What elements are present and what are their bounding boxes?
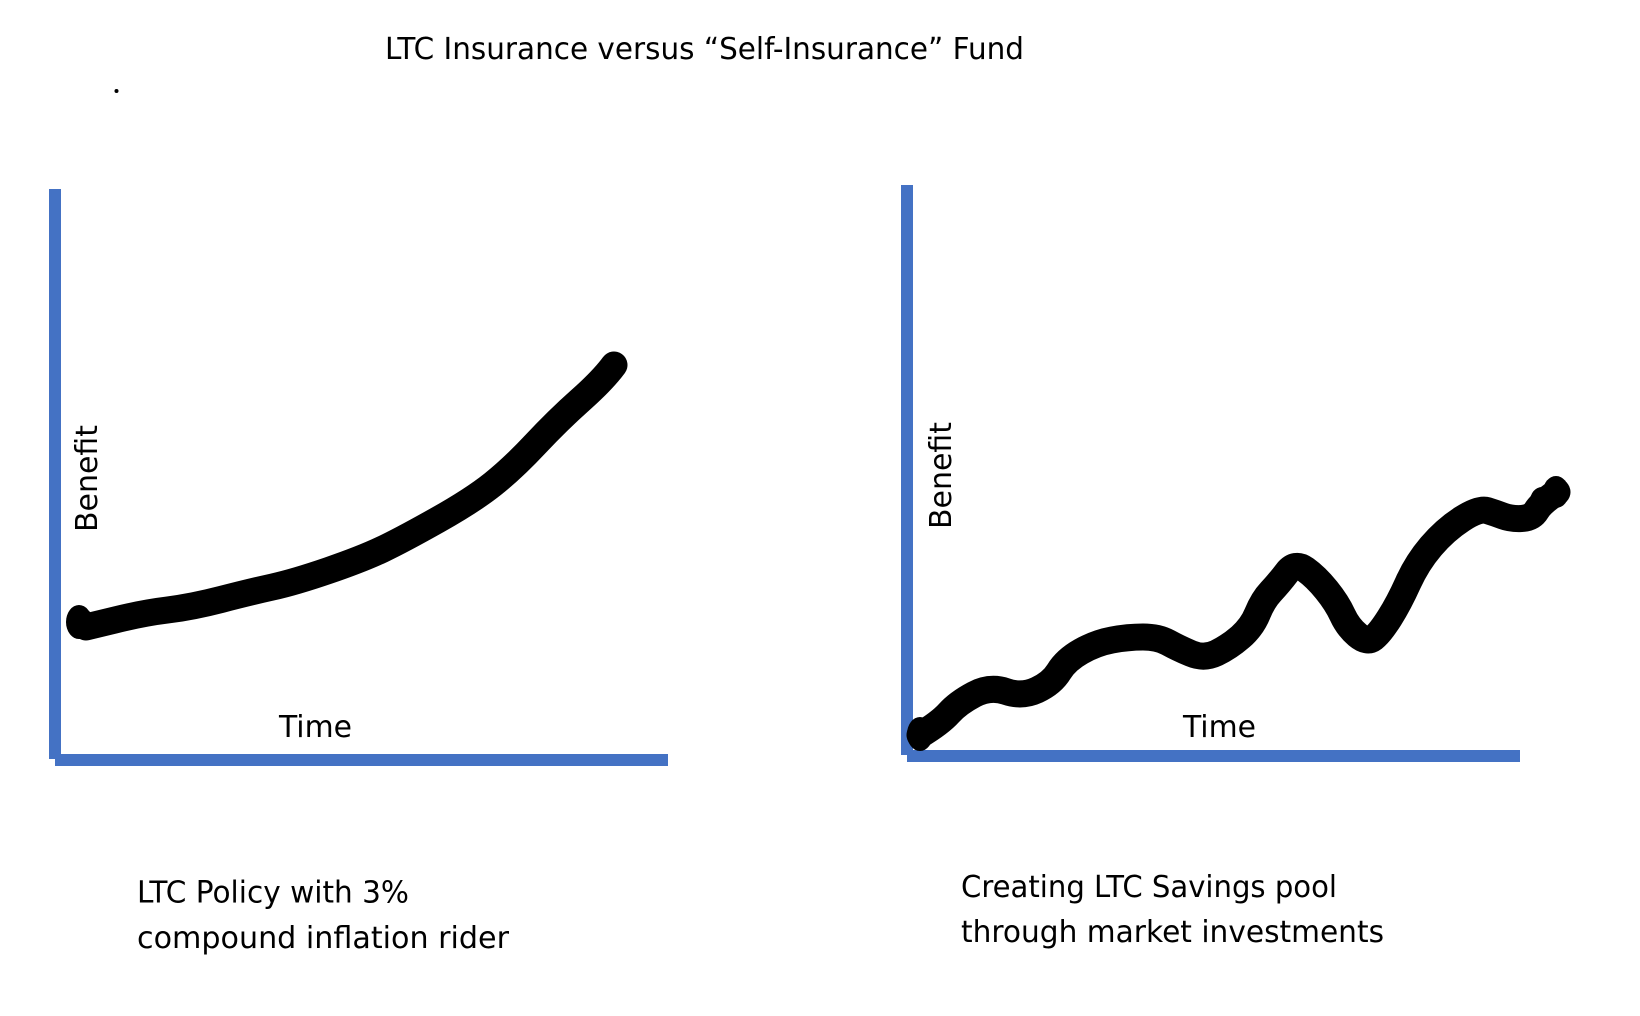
right x axis xyxy=(907,750,1520,762)
left caption: compound inflation rider xyxy=(137,921,510,956)
left x axis xyxy=(55,754,668,766)
title: LTC Insurance versus “Self-Insurance” Fund xyxy=(385,32,1024,67)
panel: LTC policy chart xyxy=(49,189,668,766)
right y axis xyxy=(901,185,913,755)
panel: savings pool chart xyxy=(901,185,1569,762)
left caption xyxy=(137,876,510,956)
right caption: Creating LTC Savings pool xyxy=(961,870,1337,905)
left y axis label: Benefit xyxy=(70,425,105,532)
right caption xyxy=(961,870,1384,950)
right y axis label: Benefit xyxy=(924,422,959,529)
stray dot xyxy=(114,89,118,93)
left caption: LTC Policy with 3% xyxy=(137,876,409,910)
right curve: volatile market growth xyxy=(907,476,1569,751)
right x axis label: Time xyxy=(1182,710,1256,745)
left y axis xyxy=(49,189,61,759)
left curve: smooth compound growth xyxy=(66,365,614,639)
left x axis label: Time xyxy=(278,710,352,745)
right caption: through market investments xyxy=(961,915,1384,950)
